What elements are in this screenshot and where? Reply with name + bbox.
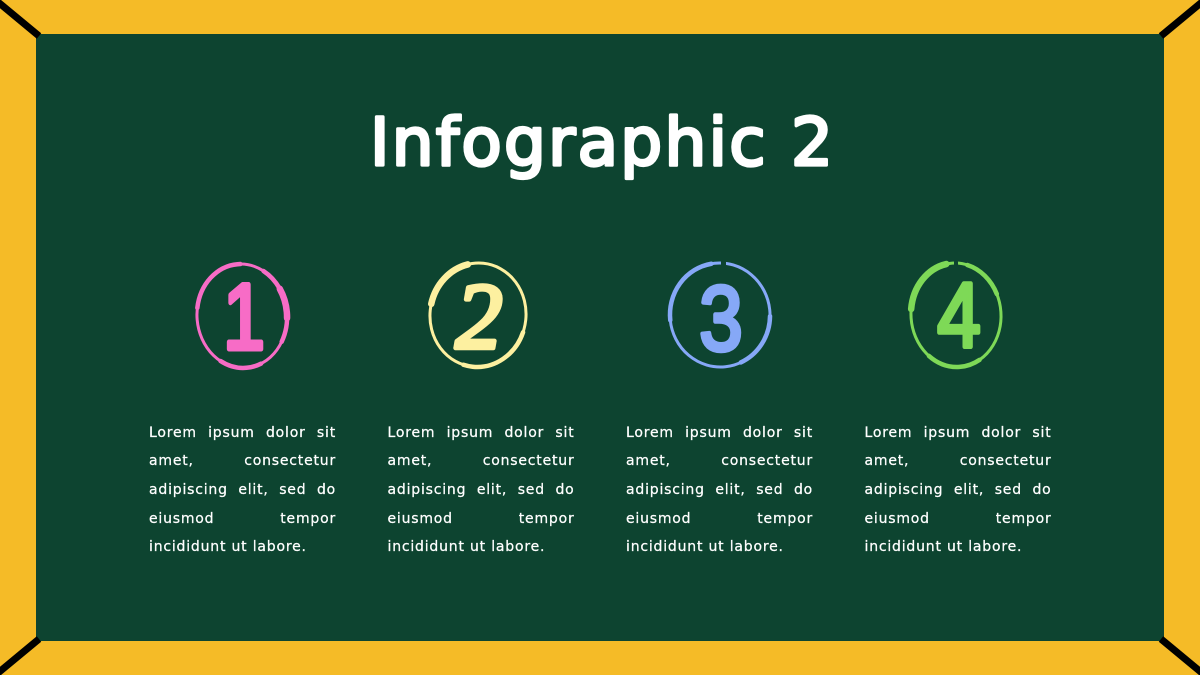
text block 2: eiusmod tempor [388, 511, 574, 527]
text block 3 [626, 424, 813, 555]
number badge 2 [425, 258, 531, 372]
text block 1: eiusmod tempor [149, 511, 336, 527]
text block 3: eiusmod tempor [626, 511, 813, 527]
text block 4 [864, 424, 1052, 555]
text block 4: incididunt ut labore. [864, 539, 1022, 555]
text block 4: eiusmod tempor [864, 511, 1052, 527]
text block 1: adipiscing elit, sed do [149, 482, 336, 498]
number badge 3 [665, 258, 775, 372]
text block 3: incididunt ut labore. [626, 539, 784, 555]
text block 2: adipiscing elit, sed do [388, 482, 574, 498]
number badge 1 [193, 260, 291, 372]
text block 1: Lorem ipsum dolor sit [149, 424, 336, 440]
text block 1 [149, 424, 336, 555]
text block 4: amet, consectetur [864, 453, 1052, 469]
text block 3: adipiscing elit, sed do [626, 482, 813, 498]
number badge 4 [907, 258, 1005, 370]
text block 2 [388, 424, 574, 555]
text block 1: amet, consectetur [149, 453, 336, 469]
number badge 1: 1 [223, 265, 265, 370]
number badge 2: 2 [456, 265, 502, 369]
text block 3: amet, consectetur [626, 453, 813, 469]
text block 4: Lorem ipsum dolor sit [864, 424, 1052, 440]
text block 2: Lorem ipsum dolor sit [388, 424, 574, 440]
number badge 3: 3 [699, 268, 743, 370]
text block 2: amet, consectetur [388, 453, 574, 469]
text block 4: adipiscing elit, sed do [864, 482, 1052, 498]
number badge 4: 4 [937, 265, 981, 367]
text block 1: incididunt ut labore. [149, 539, 307, 555]
text block 2: incididunt ut labore. [388, 539, 545, 555]
text block 3: Lorem ipsum dolor sit [626, 424, 813, 440]
title: Infographic 2 [370, 104, 833, 181]
